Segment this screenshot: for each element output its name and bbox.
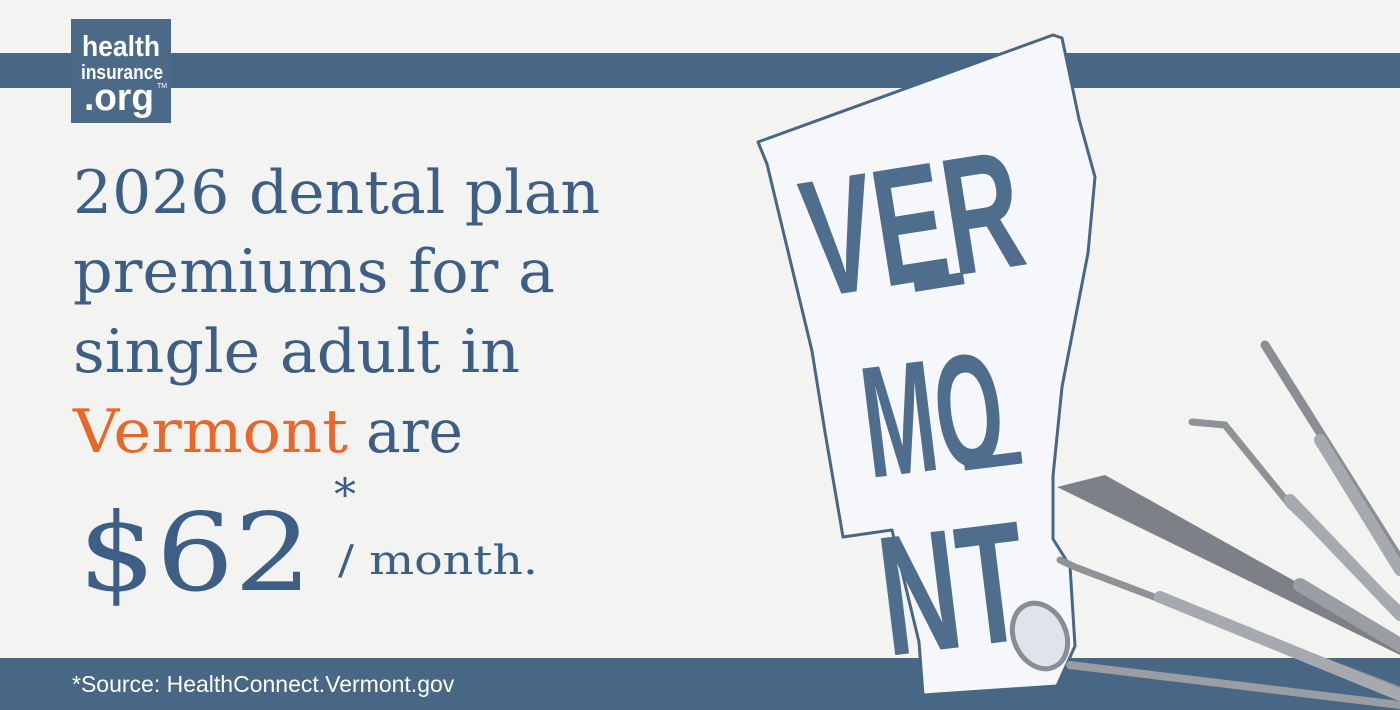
logo: [71, 19, 171, 123]
price: $62: [78, 491, 312, 616]
vermont map: NT: [869, 486, 1036, 693]
price: / month.: [338, 538, 538, 584]
source: *Source: HealthConnect.Vermont.gov: [72, 671, 455, 697]
logo: health: [82, 31, 160, 63]
logo: insurance: [81, 62, 163, 84]
price: *: [334, 470, 356, 521]
price: [78, 470, 538, 616]
logo: TM: [157, 83, 167, 90]
headline: 2026 dental plan: [73, 158, 600, 228]
headline: single adult in: [73, 317, 520, 387]
bottom band: [0, 658, 1400, 710]
headline: Vermont: [72, 397, 348, 467]
headline: premiums for a: [73, 237, 555, 307]
vermont map: MO: [852, 318, 1013, 512]
headline: [72, 158, 600, 467]
dental instruments: [1002, 345, 1400, 705]
top band: [0, 53, 1400, 88]
vermont map: [758, 35, 1095, 695]
headline: are: [366, 397, 463, 467]
logo: .org: [84, 77, 154, 119]
vermont map: VER: [790, 114, 1035, 333]
